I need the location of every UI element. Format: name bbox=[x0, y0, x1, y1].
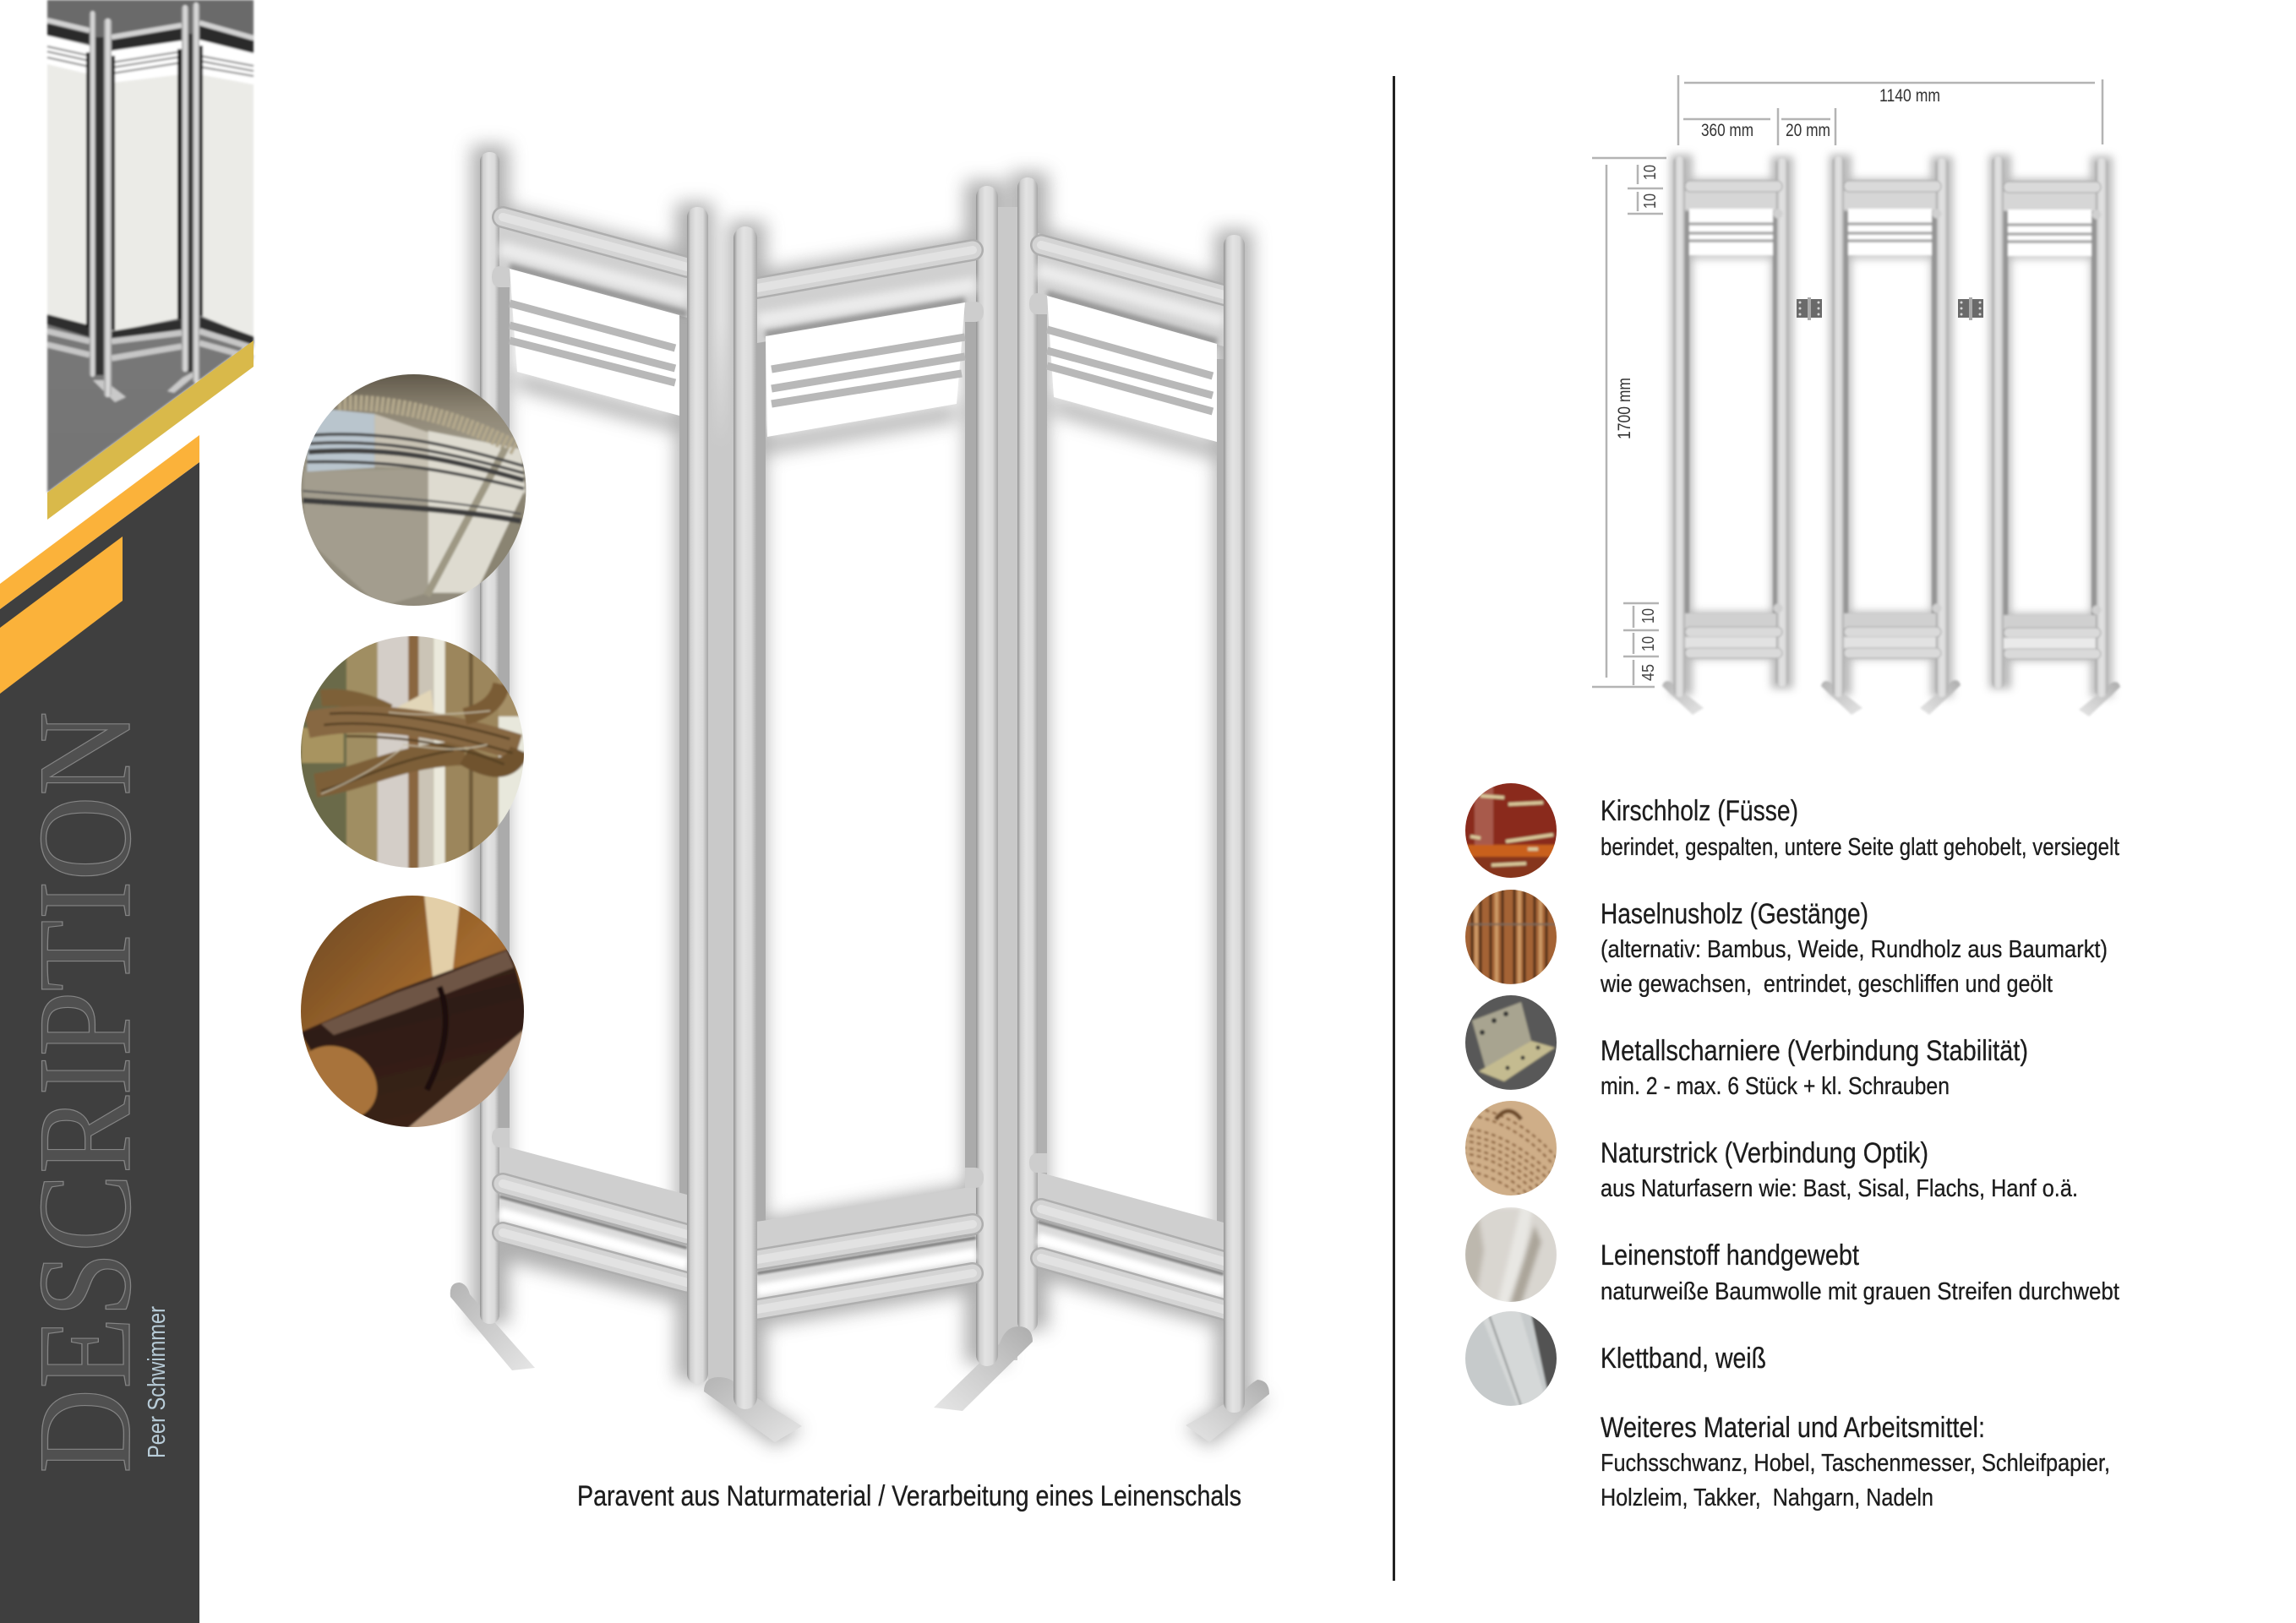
text: Naturstrick bbox=[1601, 1137, 2078, 1202]
text: Leinenstoff: naturweiße Baumwolle mit grauen Streifen durchwebt bbox=[1601, 1278, 2119, 1305]
author name: Peer Schwimmer bbox=[144, 1306, 171, 1458]
panel 3 end caps bbox=[1029, 293, 1047, 1173]
text: Metallscharniere: min. 2 - max. 6 Stück + kl. Schrauben bbox=[1601, 1073, 1950, 1100]
text: Haselnusholz: Haselnusholz (Gestänge) bbox=[1601, 898, 1868, 930]
text: further materials: Holzleim, Takker, Nahgarn, Nadeln bbox=[1601, 1484, 1933, 1511]
panel 3 shaded bands bbox=[1038, 233, 1224, 1301]
text: Metallscharniere bbox=[1601, 1035, 2028, 1100]
panel 1 right post bbox=[687, 207, 708, 1384]
detail photo: rope knot bbox=[301, 636, 524, 868]
dimension labels: 20 mm bbox=[1786, 121, 1830, 140]
dimension labels: 10 bbox=[1639, 636, 1658, 651]
panel 1 shaded bands bbox=[499, 215, 687, 1276]
dimension labels: 10 bbox=[1641, 193, 1660, 209]
panel 2 end caps bbox=[965, 302, 984, 1188]
panel 3 inner posts bbox=[1038, 308, 1224, 1229]
panel 2 right post bbox=[976, 186, 998, 1366]
hinge icon 2 bbox=[1958, 297, 1983, 320]
icon: metal hinge bbox=[1465, 995, 1557, 1090]
elevation panel B bbox=[1821, 156, 1961, 715]
detail photo: linen fabric bbox=[301, 374, 526, 606]
text: Haselnusholz: (alternativ: Bambus, Weide, Rundholz aus Baumarkt) bbox=[1601, 936, 2108, 963]
panel 3 bbox=[998, 177, 1269, 1442]
icon: cherry wood bbox=[1465, 783, 1557, 878]
text: Metallscharniere: Metallscharniere (Verbindung Stabilität) bbox=[1601, 1035, 2028, 1067]
panel 3 rails bbox=[1041, 245, 1227, 1310]
text: Haselnusholz: wie gewachsen, entrindet, geschliffen und geölt bbox=[1600, 971, 2053, 998]
drawing shadows bbox=[1671, 155, 2113, 697]
text: Kirschholz: berindet, gespalten, untere Seite glatt gehobelt, versiegelt bbox=[1601, 834, 2119, 861]
gold accent band bbox=[47, 340, 254, 520]
gutter strip left bbox=[708, 321, 734, 1381]
sidebar title: DESCRIPTION bbox=[11, 711, 159, 1473]
main paravent drawing bbox=[450, 145, 1269, 1446]
text: Klettband: Klettband, weiß bbox=[1601, 1343, 1766, 1375]
detail photo: cherry wood foot bbox=[301, 896, 524, 1127]
panel 1 rails bbox=[503, 217, 687, 1283]
panel 1 post over foot bbox=[480, 1250, 499, 1324]
sidebar dark panel bbox=[0, 462, 199, 1623]
dimension lines bbox=[1592, 75, 2102, 687]
text: further materials: Fuchsschwanz, Hobel, Taschenmesser, Schleifpapier, bbox=[1601, 1450, 2110, 1477]
panel 1 end caps bbox=[492, 266, 510, 1147]
panel 3 fabric with stripes bbox=[1047, 296, 1217, 442]
panel 2 rails bbox=[752, 250, 973, 1310]
text: Leinenstoff: Leinenstoff handgewebt bbox=[1601, 1239, 1859, 1272]
orange accent band bbox=[0, 435, 199, 609]
orange accent block bbox=[0, 536, 123, 694]
text: Kirschholz: Kirschholz (Füsse) bbox=[1601, 795, 1798, 827]
panel 2 left foot bbox=[704, 1377, 802, 1442]
icon: velcro tape bbox=[1465, 1311, 1557, 1406]
caption: Paravent aus Naturmaterial / Verarbeitung eines Leinenschals bbox=[577, 1480, 1241, 1512]
icon: hazel rods bbox=[1465, 890, 1557, 984]
panel 1 inner posts bbox=[499, 283, 687, 1200]
dimension labels: 360 mm bbox=[1701, 121, 1753, 140]
panel 2 shaded bands bbox=[757, 250, 976, 1301]
panel 1 left post bbox=[480, 152, 499, 1324]
panel 2 bbox=[704, 186, 1033, 1442]
panel 1 bbox=[450, 152, 708, 1384]
text: Haselnusholz bbox=[1600, 898, 2108, 998]
dimension labels: 45 bbox=[1639, 664, 1658, 681]
panel 3 left post bbox=[1017, 177, 1038, 1332]
elevation panel C bbox=[1993, 156, 2120, 716]
dimension labels bbox=[1615, 86, 1940, 681]
material list bbox=[1462, 782, 2119, 1511]
panel 2 fabric with stripes bbox=[766, 302, 965, 437]
dimension labels: 1700 mm bbox=[1615, 378, 1634, 439]
icon: natural twine bbox=[1465, 1101, 1557, 1195]
divider bbox=[1393, 76, 1395, 1581]
panel 2 right foot bbox=[934, 1326, 1033, 1411]
panel 2 left post bbox=[734, 226, 757, 1409]
panel 3 right foot bbox=[1186, 1380, 1269, 1442]
panel 2 inner posts bbox=[757, 317, 976, 1221]
technical drawing bbox=[1592, 75, 2120, 716]
dimension labels: 1140 mm bbox=[1879, 86, 1940, 106]
dimension labels: 10 bbox=[1641, 165, 1660, 180]
soft shadows bbox=[472, 145, 1269, 1446]
text: Kirschholz bbox=[1601, 795, 2119, 861]
dimension labels: 10 bbox=[1639, 608, 1658, 624]
gutter strip bbox=[998, 207, 1017, 1360]
text: further materials bbox=[1601, 1412, 2110, 1511]
text: Leinenstoff bbox=[1601, 1239, 2119, 1305]
header photo of paravent bbox=[47, 0, 254, 493]
text: further materials: Weiteres Material und Arbeitsmittel: bbox=[1601, 1412, 1985, 1444]
panel 1 left foot bbox=[450, 1283, 535, 1370]
elevation panel A bbox=[1662, 156, 1788, 715]
sidebar bbox=[0, 435, 199, 1623]
panel 3 right post bbox=[1224, 235, 1245, 1413]
icon: linen fabric bbox=[1465, 1207, 1557, 1302]
panel 1 fabric with stripes bbox=[510, 269, 679, 416]
text: Naturstrick: aus Naturfasern wie: Bast, Sisal, Flachs, Hanf o.ä. bbox=[1601, 1175, 2078, 1202]
text: Naturstrick: Naturstrick (Verbindung Optik) bbox=[1601, 1137, 1928, 1169]
hinge icon 1 bbox=[1797, 297, 1822, 320]
